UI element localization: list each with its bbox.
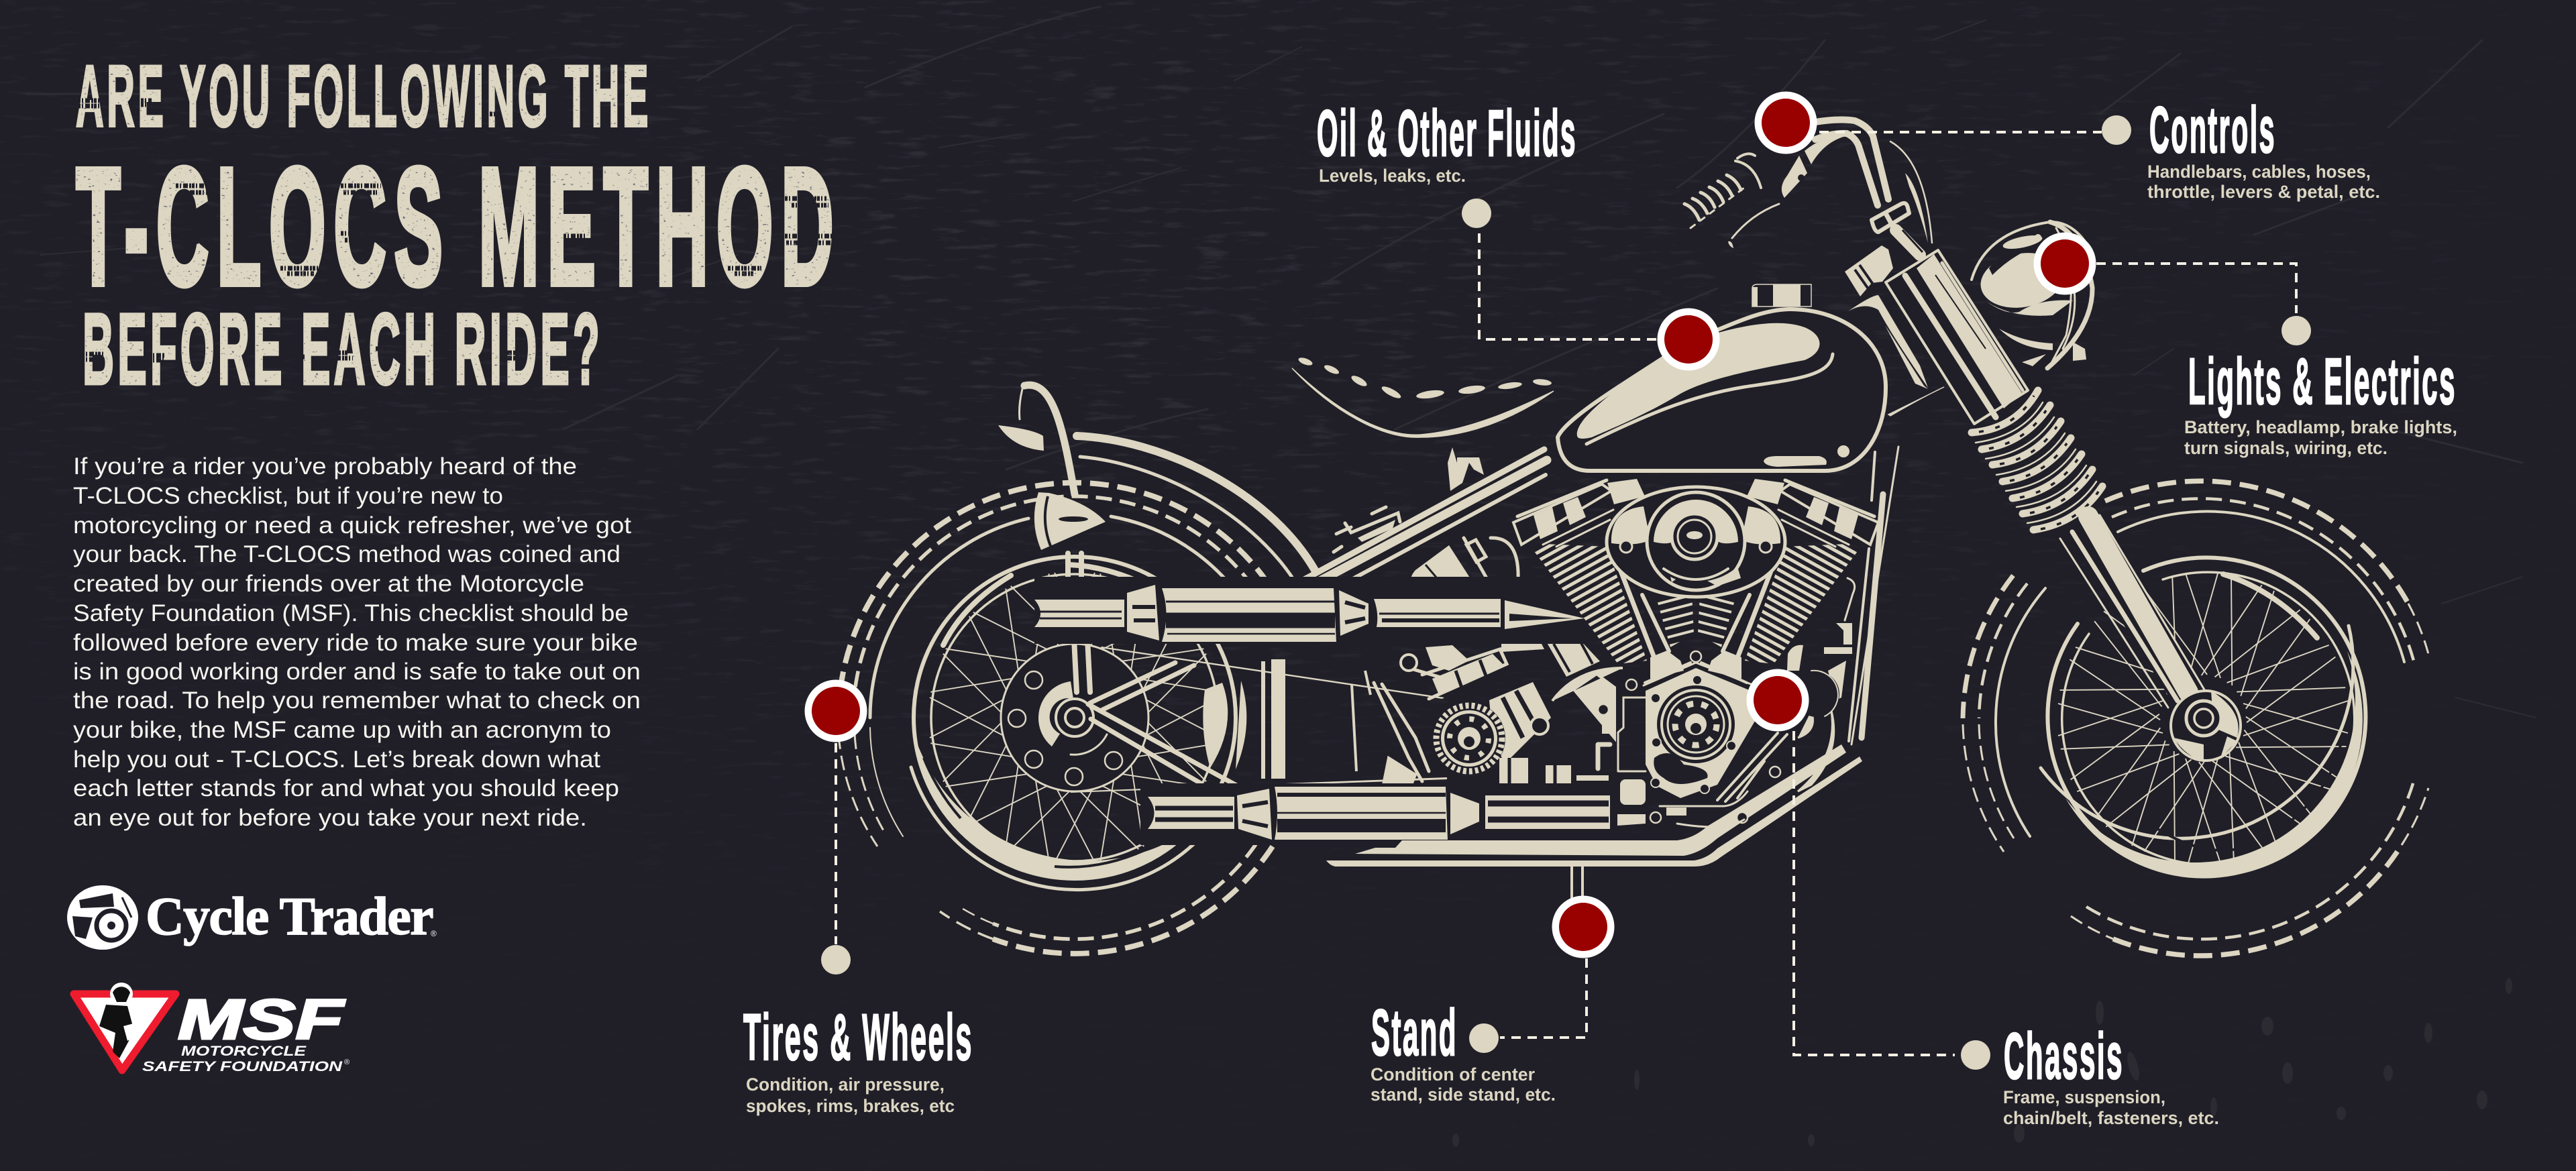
- title distress specks: [67, 57, 845, 392]
- rear wheel: [839, 483, 1285, 954]
- logo: Cycle Trader: ®: [431, 929, 437, 938]
- label: chassis: [2003, 1019, 2219, 1128]
- body paragraph: an eye out for before you take your next ride.: [73, 805, 587, 831]
- front hub: [2171, 691, 2241, 761]
- background texture: [260, 0, 1911, 605]
- body paragraph: created by our friends over at the Motorcycle: [73, 571, 584, 597]
- label: lights and electrics: [2184, 345, 2457, 458]
- fork spring: [1972, 390, 2102, 530]
- front rim: [2047, 557, 2365, 879]
- label: stand: stand, side stand, etc.: [1371, 1084, 1556, 1105]
- grip: [1684, 154, 1761, 228]
- marker: oil and other fluids: [1657, 309, 1720, 370]
- fork crown: [1845, 245, 1893, 296]
- clamp: [1872, 203, 1909, 232]
- oil bag and battery parts: [1334, 447, 1623, 791]
- text: T-CLOCS METHOD: [76, 133, 841, 320]
- frame tubes: [1298, 447, 1898, 744]
- label: lights and electrics: turn signals, wiring, etc.: [2184, 438, 2387, 458]
- body paragraph: followed before every ride to make sure your bike: [73, 630, 638, 656]
- logo: MSF: [74, 983, 350, 1074]
- upper exhaust: [1034, 577, 1591, 644]
- upper fork tube: [1886, 250, 2028, 424]
- exhausts: [1034, 577, 1862, 899]
- rear fender and tail light: [998, 385, 1315, 692]
- title: BEFORE EACH RIDE?: [83, 292, 603, 405]
- connector: lights and electrics: [2096, 264, 2311, 345]
- rear spokes: [930, 573, 1220, 862]
- lower exhaust: [1140, 783, 1623, 845]
- label: tires and wheels: spokes, rims, brakes, etc: [746, 1096, 955, 1116]
- fuel cap: [1752, 284, 1811, 306]
- cylinders: [1513, 479, 1878, 683]
- label: controls: Controls: [2149, 93, 2276, 166]
- engine: [1513, 479, 1878, 827]
- body paragraph: If you’re a rider you’ve probably heard of the: [73, 453, 577, 480]
- seat: [1292, 356, 1554, 437]
- rear tire tread: [839, 483, 1273, 954]
- connector: controls: [1819, 115, 2131, 145]
- label: tires and wheels: Condition, air pressure,: [746, 1074, 945, 1095]
- body paragraph: T-CLOCS checklist, but if you’re new to: [73, 483, 503, 509]
- lever: [1782, 156, 1807, 198]
- front spokes: [2058, 573, 2348, 863]
- label: oil and other fluids: [1317, 97, 1577, 186]
- background specks: [1452, 978, 2512, 1147]
- title: [75, 64, 832, 386]
- label: controls: Handlebars, cables, hoses,: [2147, 162, 2371, 182]
- handlebars and controls: [1684, 120, 1932, 255]
- connector: oil and other fluids: [1462, 199, 1658, 339]
- air cleaner: [1607, 487, 1785, 597]
- body paragraph: motorcycling or need a quick refresher, we’ve got: [73, 512, 631, 539]
- marker: tires and wheels: [805, 680, 867, 742]
- text: Tires & Wheels: [743, 1001, 973, 1074]
- body paragraph: the road. To help you remember what to check on: [73, 687, 641, 714]
- seat stitching: [1297, 356, 1552, 400]
- label: lights and electrics: Battery, headlamp, brake lights,: [2184, 417, 2457, 437]
- fuel tank: [1558, 284, 1886, 471]
- label: stand: [1371, 996, 1556, 1105]
- background scratches: [27, 7, 2536, 718]
- belt lines: [1071, 647, 1447, 793]
- body paragraph: help you out - T-CLOCS. Let’s break down what: [73, 746, 600, 773]
- body paragraph: Safety Foundation (MSF). This checklist should be: [73, 600, 629, 626]
- body paragraph: is in good working order and is safe to take out on: [73, 659, 641, 685]
- rear rim: [914, 557, 1236, 879]
- label: controls: [2147, 93, 2380, 202]
- title: ARE YOU FOLLOWING THE: [76, 47, 651, 145]
- body paragraph: each letter stands for and what you should keep: [73, 775, 619, 801]
- label: stand: Stand: [1371, 996, 1458, 1069]
- label: chassis: chain/belt, fasteners, etc.: [2003, 1108, 2219, 1128]
- icon: MSF triangle with rider: [74, 983, 176, 1070]
- body paragraph: [73, 453, 641, 831]
- lower fork: [2060, 510, 2210, 708]
- marker: chassis: [1747, 669, 1809, 731]
- logo: MSF: MOTORCYCLE: [181, 1044, 307, 1059]
- marker: stand: [1552, 896, 1614, 958]
- label: tires and wheels: [743, 1001, 973, 1116]
- gearbox and pulley: [1433, 682, 1609, 791]
- crankcase: [1598, 578, 1855, 827]
- lower pipes: [1326, 744, 1862, 867]
- logo: Cycle Trader: Cycle Trader: [146, 887, 433, 946]
- motorcycle illustration: [839, 120, 2428, 956]
- rear hub and sprocket disc: [1001, 644, 1148, 791]
- logo: MSF: SAFETY FOUNDATION: [142, 1059, 343, 1074]
- headlight: [1972, 222, 2093, 368]
- label: controls: throttle, levers & petal, etc.: [2147, 182, 2380, 202]
- swingarm and shock: [1088, 659, 1285, 786]
- icon: cycle trader badge: [67, 885, 138, 950]
- front wheel: [1963, 481, 2428, 956]
- label: oil and other fluids: Levels, leaks, etc.: [1319, 166, 1466, 186]
- text: Oil & Other Fluids: [1317, 97, 1577, 170]
- bar: [1811, 120, 1888, 199]
- label: stand: Condition of center: [1371, 1064, 1535, 1084]
- body paragraph: your bike, the MSF came up with an acronym to: [73, 717, 611, 743]
- fork: [1845, 245, 2428, 956]
- label: chassis: Chassis: [2004, 1019, 2124, 1093]
- marker: lights and electrics: [2034, 232, 2096, 295]
- front tire tread: [1963, 481, 2428, 956]
- marker: controls: [1755, 91, 1817, 154]
- logo: MSF: MSF: [178, 988, 346, 1051]
- body paragraph: your back. The T-CLOCS method was coined and: [73, 541, 621, 567]
- connector: tires and wheels: [821, 743, 851, 974]
- logo: MSF: ®: [344, 1058, 350, 1066]
- label: chassis: Frame, suspension,: [2003, 1087, 2165, 1107]
- connector: chassis: [1794, 731, 1990, 1070]
- connector: stand: [1469, 958, 1587, 1053]
- stand: [1572, 867, 1582, 899]
